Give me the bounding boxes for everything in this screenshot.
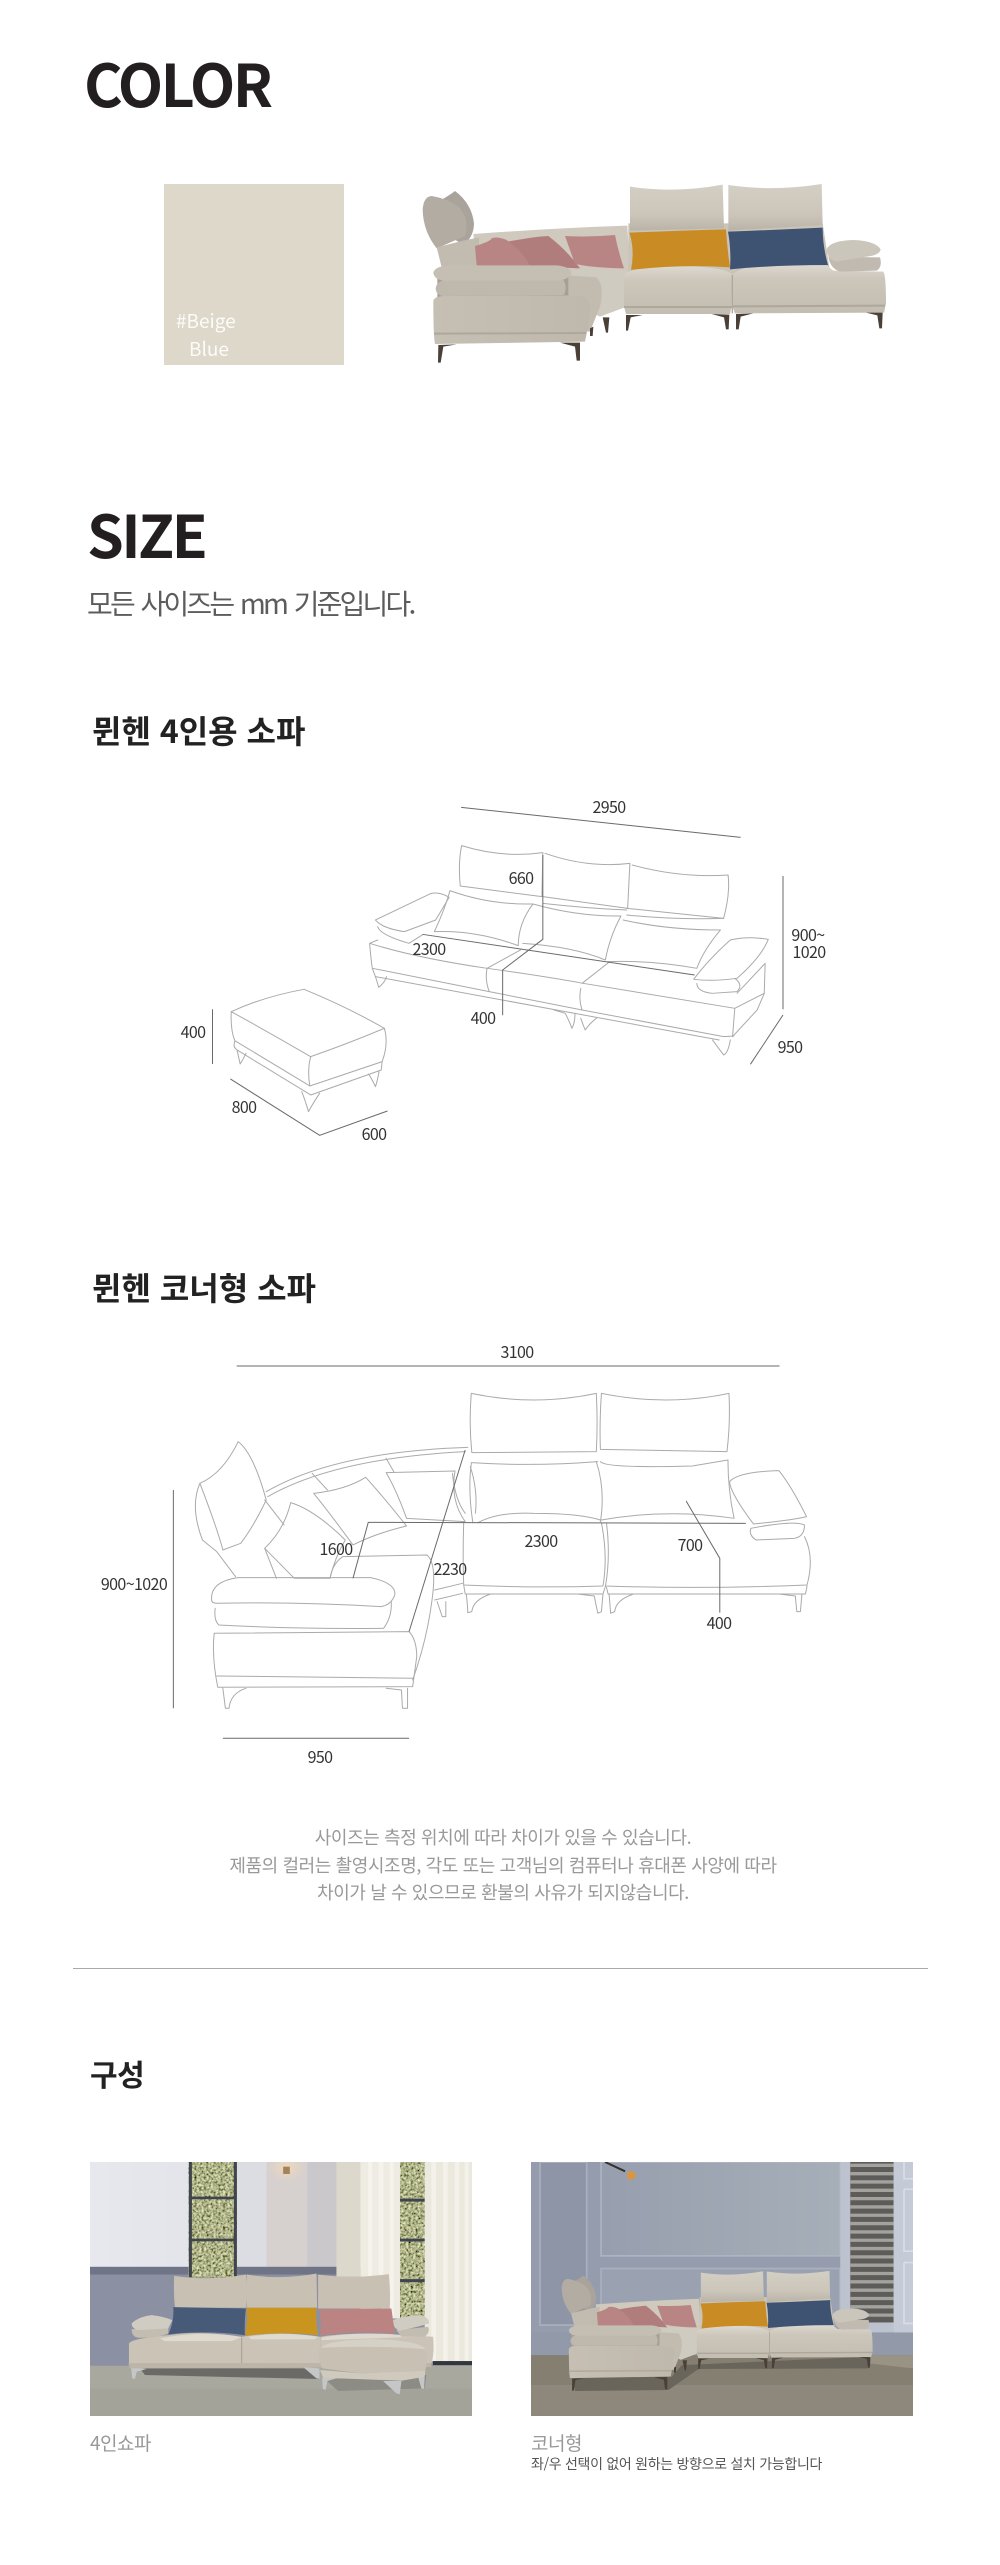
- line drawing: ottoman: [231, 989, 386, 1112]
- photo: 4-seat sofa in a room: [90, 2162, 472, 2416]
- dimension lines: [212, 807, 783, 1135]
- diagram: 4-seat sofa and ottoman dimensions: [180, 794, 826, 1145]
- caption: 4-seat sofa: 4인쇼파: [90, 2429, 151, 2456]
- swatch label: Blue: Blue: [189, 335, 229, 362]
- dimension labels: 2230: [433, 1556, 467, 1580]
- dimension labels: 900~1020: [101, 1571, 168, 1595]
- heading: corner sofa: 뮌헨 코너형 소파: [92, 1264, 316, 1310]
- line drawing: corner sofa: [195, 1393, 810, 1708]
- sofa: [562, 2271, 873, 2391]
- heading: composition: 구성: [90, 2051, 144, 2095]
- heading: 4-seat sofa: 뮌헨 4인용 소파: [92, 707, 305, 753]
- dimension labels: 900~: [791, 922, 825, 946]
- diagram: corner sofa dimensions: [101, 1339, 811, 1768]
- dimension labels: 400: [181, 1019, 206, 1043]
- dimension labels: 660: [509, 865, 534, 889]
- photo: corner sofa in a room: [531, 2162, 913, 2416]
- dimension labels: [181, 794, 826, 1145]
- text: size and colour disclaimer: 차이가 날 수 있으므로 환불의 사유가 되지않습니다.: [317, 1879, 689, 1905]
- dimension labels: 2950: [592, 794, 626, 818]
- dimension lines: [173, 1366, 779, 1738]
- text: size and colour disclaimer: [229, 1824, 777, 1905]
- dimension labels: 600: [362, 1121, 387, 1145]
- dimension labels: 700: [678, 1532, 703, 1556]
- dimension labels: 2300: [524, 1528, 558, 1552]
- dimension labels: 400: [471, 1005, 496, 1029]
- caption: corner type note: 좌/우 선택이 없어 원하는 방향으로 설치 가능합니다: [531, 2454, 822, 2474]
- line drawing: sofa: [370, 846, 768, 1055]
- product image: beige corner sofa: [422, 184, 886, 363]
- dimension labels: 2300: [412, 936, 446, 960]
- dimension labels: 1020: [792, 939, 826, 963]
- dimension labels: 3100: [500, 1339, 534, 1363]
- dimension labels: 400: [707, 1610, 732, 1634]
- dimension labels: [101, 1339, 732, 1768]
- dimension labels: 950: [308, 1744, 333, 1768]
- dimension labels: 1600: [319, 1536, 353, 1560]
- dimension labels: 800: [232, 1094, 257, 1118]
- text: all sizes in mm: 모든 사이즈는 mm 기준입니다.: [87, 583, 413, 623]
- text: size and colour disclaimer: 사이즈는 측정 위치에 따라 차이가 있을 수 있습니다.: [315, 1824, 691, 1850]
- swatch label: Beige: #Beige: [176, 307, 236, 334]
- sofa with ottoman: [128, 2274, 434, 2394]
- dimension labels: 950: [778, 1034, 803, 1058]
- caption: corner type: 코너형: [531, 2429, 582, 2456]
- text: size and colour disclaimer: 제품의 컬러는 촬영시조명, 각도 또는 고객님의 컴퓨터나 휴대폰 사양에 따라: [229, 1852, 777, 1878]
- heading: SIZE: SIZE: [87, 490, 205, 575]
- colour swatch: beige: [164, 184, 344, 365]
- heading: COLOR: COLOR: [84, 39, 270, 124]
